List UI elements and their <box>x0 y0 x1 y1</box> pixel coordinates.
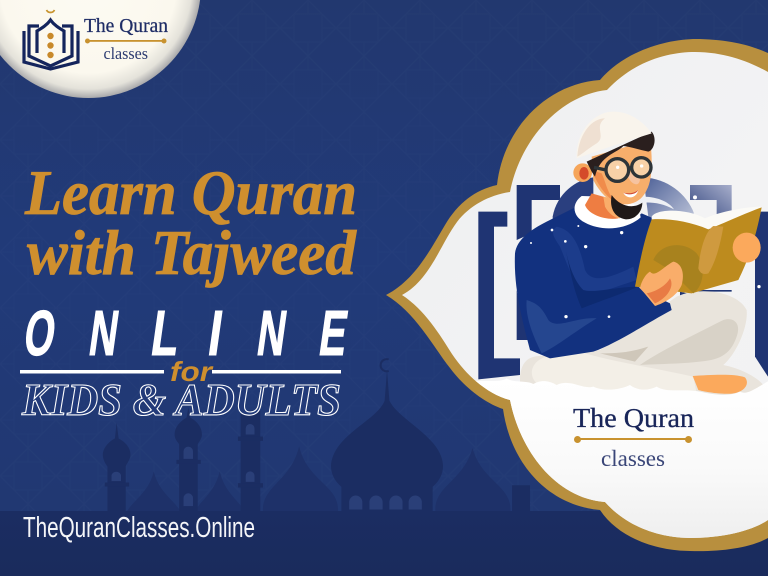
logo badge <box>0 0 201 98</box>
near hand <box>640 262 683 306</box>
logo sub text: classes <box>104 44 148 63</box>
far hand <box>733 233 761 263</box>
cloud <box>476 378 768 538</box>
heading: ONLINE: O <box>20 297 60 369</box>
mosque silhouette <box>103 359 530 512</box>
gold frame <box>386 39 768 551</box>
trousers <box>520 291 763 403</box>
cloud logo divider <box>574 436 692 443</box>
panel: arch frame <box>386 39 768 551</box>
frame interior <box>402 52 768 538</box>
heading: ONLINE: L <box>147 297 184 369</box>
glasses <box>594 158 651 181</box>
ear <box>573 163 592 182</box>
heading: ONLINE: N <box>85 297 123 369</box>
word: for: for <box>170 356 214 387</box>
heading: ONLINE <box>20 297 352 369</box>
icon: logo diamonds <box>47 33 54 58</box>
heading: KIDS & ADULTS: KIDS & ADULTS <box>21 375 341 425</box>
head <box>573 112 655 219</box>
sparkles <box>530 195 761 318</box>
icon: mosque book logo <box>24 10 78 69</box>
sweater <box>515 207 672 358</box>
hair <box>587 132 655 177</box>
divider with for <box>20 356 341 387</box>
face <box>592 140 652 204</box>
heading: ONLINE: N <box>253 297 291 369</box>
website url: TheQuranClasses.Online <box>23 512 255 544</box>
book <box>635 207 762 293</box>
beard <box>611 195 642 219</box>
cloud logo name: The Quran <box>573 403 695 433</box>
badge circle <box>0 0 201 98</box>
cap <box>577 112 652 158</box>
heading: ONLINE: E <box>315 297 352 369</box>
logo name: The Quran <box>84 16 168 37</box>
icon: large logo backdrop <box>478 177 768 379</box>
cloud logo sub text: classes <box>601 446 665 471</box>
heading: with Tajweed: with Tajweed <box>27 218 357 288</box>
logo divider <box>85 38 166 44</box>
neck and collar <box>575 193 641 228</box>
illustration: reading boy <box>476 112 768 538</box>
foot <box>693 375 747 394</box>
heading: ONLINE: I <box>204 297 227 369</box>
bottom band <box>0 511 768 576</box>
heading: Learn Quran: Learn Quran <box>24 158 357 228</box>
